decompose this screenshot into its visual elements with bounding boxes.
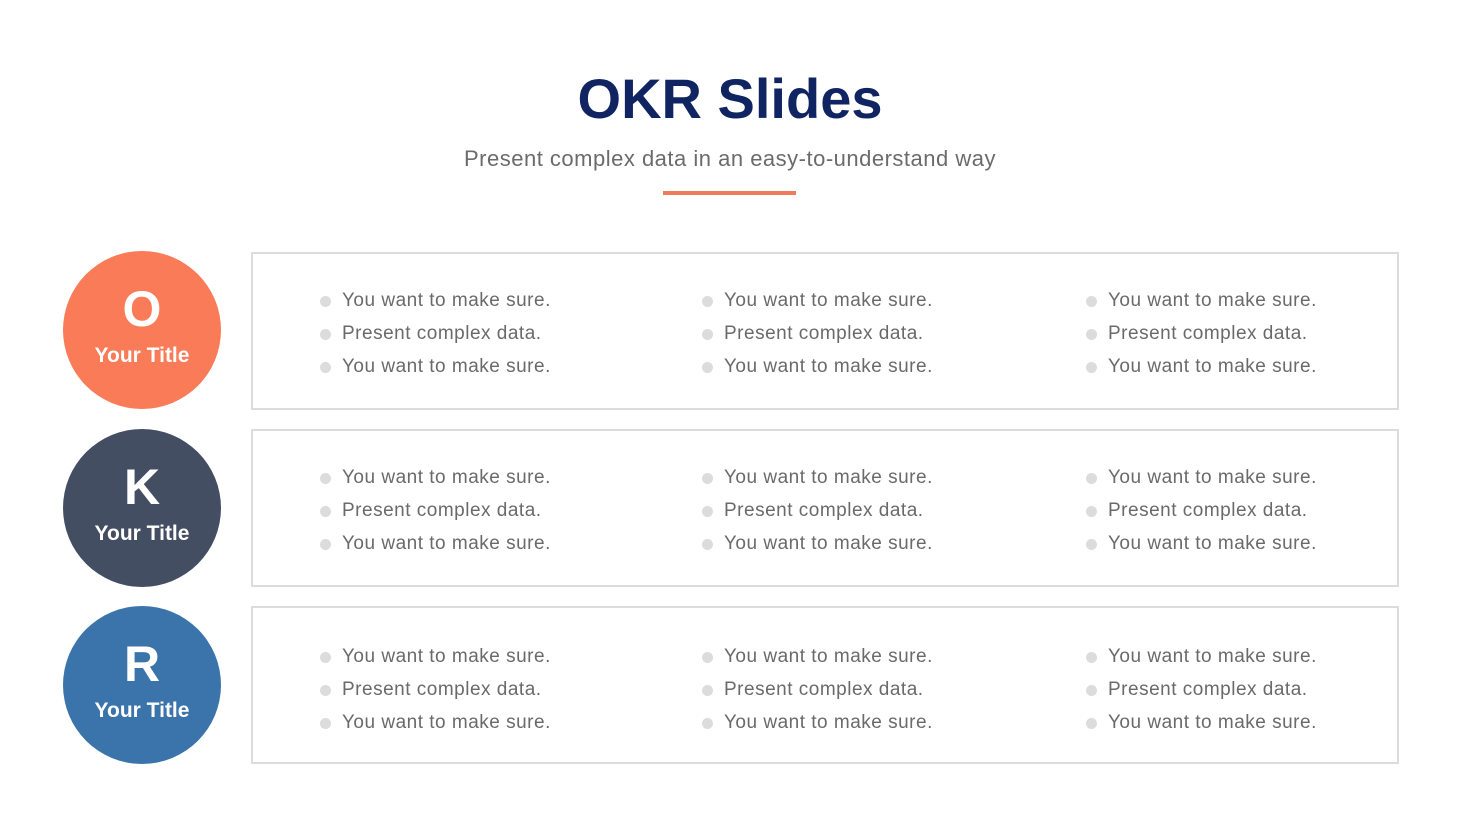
panel: K items: Present complex data. [1108,500,1308,521]
panel: O items: You want to make sure. [1108,356,1317,377]
panel: O items: Present complex data. [1108,323,1308,344]
panel: K items: You want to make sure. [342,533,551,554]
circle: O: O [123,281,161,337]
panel: R items: Present complex data. [342,679,542,700]
panel: R items [251,606,1399,764]
panel: K items: You want to make sure. [724,533,933,554]
panel: R items: You want to make sure. [724,712,933,733]
circle: R: R [124,636,160,692]
panel: K items: You want to make sure. [724,467,933,488]
panel: R items: You want to make sure. [1108,712,1317,733]
panel: O items: You want to make sure. [342,356,551,377]
subtitle: Present complex data in an easy-to-understand way [464,146,996,171]
panel: K items: You want to make sure. [1108,533,1317,554]
panel: R items: You want to make sure. [1108,646,1317,667]
panel: R items: Present complex data. [1108,679,1308,700]
panel: O items [251,252,1399,410]
panel: R items: You want to make sure. [724,646,933,667]
title: OKR Slides [578,67,882,130]
panel: O items: Present complex data. [724,323,924,344]
circle: O: Your Title [95,344,189,367]
panel: R items: Present complex data. [724,679,924,700]
panel: O items: You want to make sure. [342,290,551,311]
panel: R items: You want to make sure. [342,646,551,667]
panel: O items: Present complex data. [342,323,542,344]
circle: K: Your Title [95,522,189,545]
circle: K [63,429,221,587]
circle: O [63,251,221,409]
panel: R items: You want to make sure. [342,712,551,733]
circle: R: Your Title [95,699,189,722]
panel: K items: Present complex data. [724,500,924,521]
panel: K items: You want to make sure. [342,467,551,488]
panel: K items: Present complex data. [342,500,542,521]
panel: O items: You want to make sure. [724,356,933,377]
panel: K items [251,429,1399,587]
panel: O items: You want to make sure. [724,290,933,311]
accent underline [663,191,796,195]
circle: R [63,606,221,764]
panel: K items: You want to make sure. [1108,467,1317,488]
panel: O items: You want to make sure. [1108,290,1317,311]
circle: K: K [124,459,160,515]
